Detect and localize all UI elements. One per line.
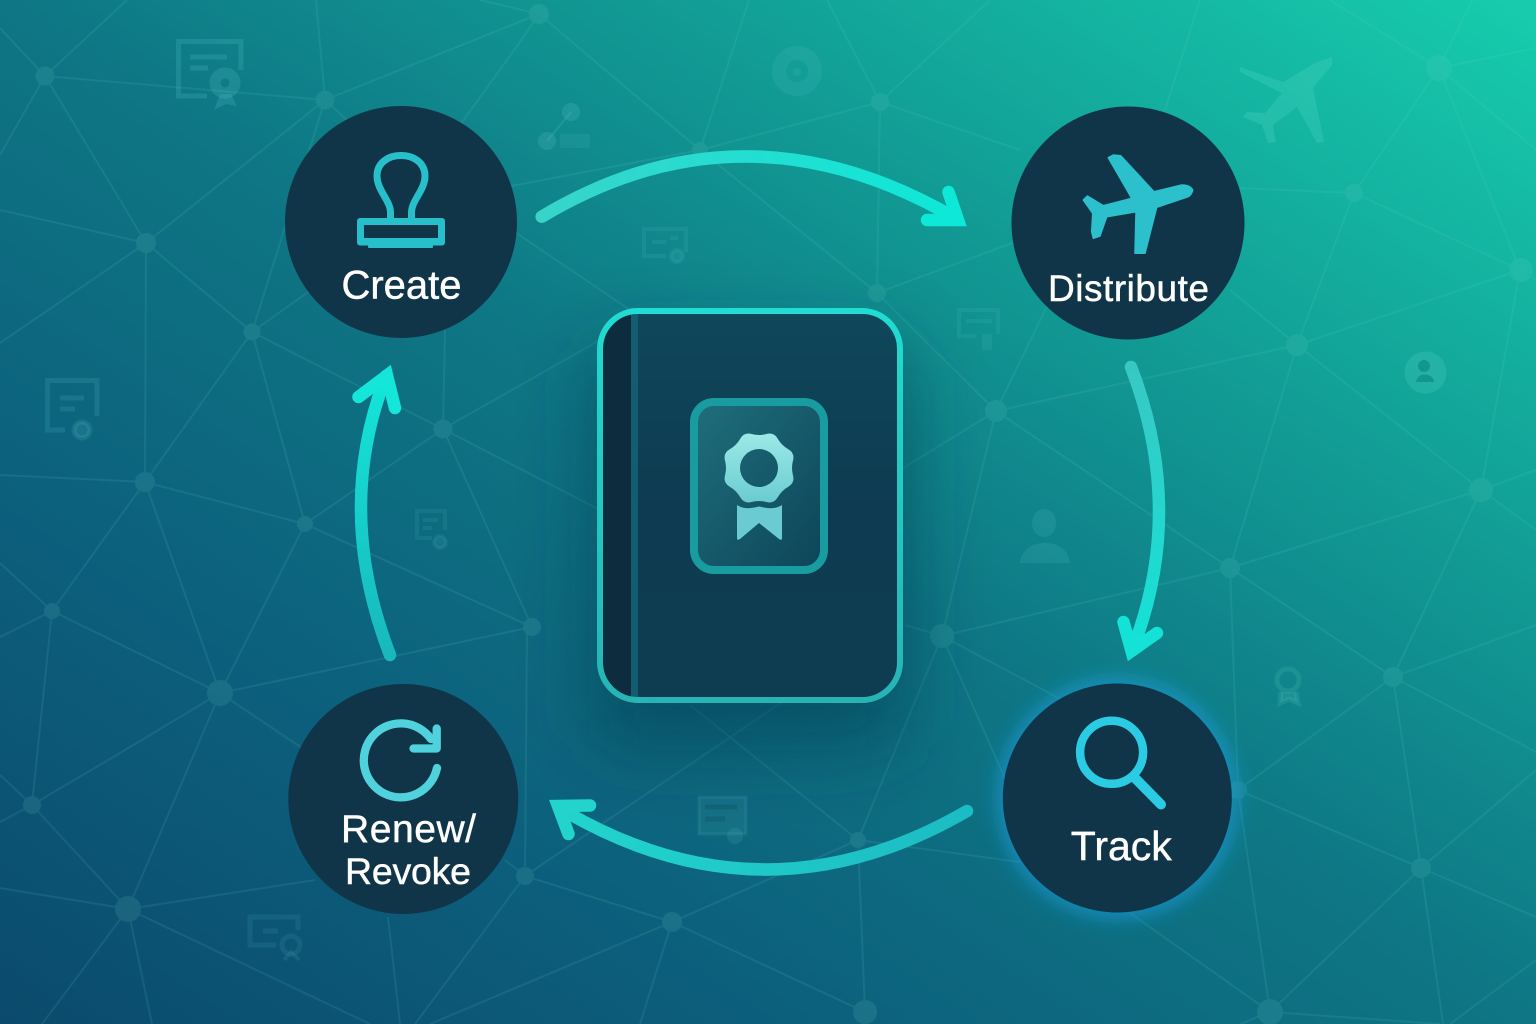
label: Create: Create bbox=[341, 264, 462, 308]
rosette icon bbox=[725, 434, 793, 540]
faint icon: certificate center left bbox=[417, 511, 446, 548]
faint icon: user circle bbox=[1404, 352, 1446, 394]
cycle arrows bbox=[358, 156, 1159, 870]
step: Create bbox=[285, 106, 517, 338]
faint icon: certificate left bbox=[48, 380, 97, 438]
faint icon: certificate center top bbox=[644, 229, 686, 262]
label: Distribute: Distribute bbox=[1048, 268, 1209, 309]
faint icon: certificate right of center bbox=[959, 310, 998, 350]
book spine bbox=[603, 314, 631, 697]
faint icon: user bbox=[1020, 509, 1070, 563]
book border bbox=[600, 311, 900, 700]
label: Renew/Revoke: Revoke bbox=[345, 850, 471, 892]
step: Renew/Revoke bbox=[288, 684, 518, 914]
icon: airplane bbox=[1083, 155, 1193, 253]
faint icon: badge bbox=[1277, 669, 1299, 703]
label: Renew/Revoke bbox=[341, 808, 476, 892]
arrow: create to distribute bbox=[542, 156, 958, 220]
icon: magnifier bbox=[1080, 721, 1161, 804]
arrow: track to renew bbox=[558, 806, 967, 870]
faint icon: certificate bottom left bbox=[250, 917, 300, 960]
faint icon: gear bbox=[779, 53, 815, 89]
faint icon: certificate top left bbox=[178, 42, 241, 110]
arrow: distribute to track bbox=[1124, 367, 1159, 651]
arrow: renew to create bbox=[358, 376, 395, 655]
icon: renew arrow bbox=[364, 723, 437, 797]
track glow bbox=[998, 679, 1236, 917]
faint background icons bbox=[48, 42, 998, 960]
central passport book bbox=[600, 311, 900, 700]
step: Distribute bbox=[1012, 106, 1244, 340]
icon: stamp bbox=[357, 156, 445, 248]
faint icon: airplane bbox=[1240, 57, 1332, 143]
faint icon: certificate bottom center bbox=[699, 797, 746, 844]
label: Renew/Revoke: Renew/ bbox=[341, 808, 476, 851]
label: Track: Track bbox=[1071, 823, 1172, 869]
certificate badge bbox=[694, 402, 824, 570]
step: Track bbox=[1003, 684, 1232, 912]
book shadow bbox=[590, 345, 910, 750]
faint icon: share nodes bbox=[538, 103, 590, 150]
